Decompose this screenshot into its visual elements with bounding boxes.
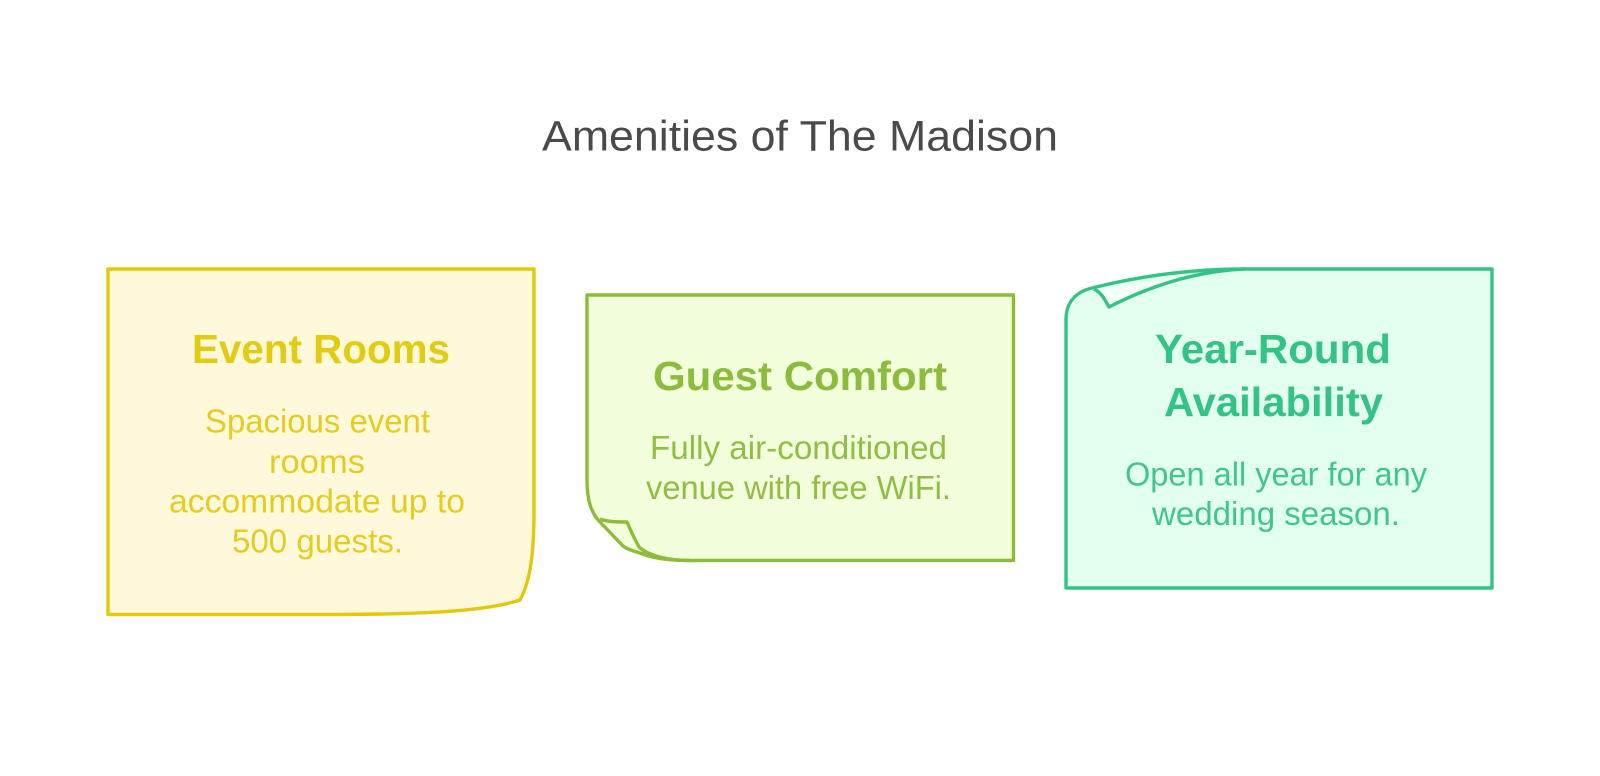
text: Year-Round description: Open all year for any [1125, 456, 1427, 492]
icon: folded corner [600, 519, 690, 560]
heading: Year-Round Availability [1155, 326, 1391, 425]
text: Guest Comfort description: venue with free WiFi. [646, 469, 951, 506]
heading: Event Rooms: Event Rooms [192, 326, 450, 372]
text: Event Rooms description: 500 guests. [232, 522, 403, 560]
heading: Guest Comfort: Guest Comfort [653, 353, 947, 399]
text: Year-Round description [1125, 456, 1427, 532]
text: Guest Comfort description [646, 429, 951, 506]
text: Event Rooms description: Spacious event [205, 402, 430, 440]
card shape: mint note with curled corner [1066, 269, 1492, 588]
heading: Year-Round Availability: Year-Round [1155, 326, 1391, 372]
panel: Year-Round Availability [1066, 269, 1492, 588]
text: Year-Round description: wedding season. [1151, 495, 1400, 532]
title: Amenities of The Madison [542, 113, 1058, 161]
card shape: lime note with folded corner [587, 295, 1014, 560]
text: Guest Comfort description: Fully air-conditioned [650, 429, 947, 466]
text: Event Rooms description: accommodate up to [169, 482, 465, 520]
text: Event Rooms description [169, 402, 465, 560]
text: Event Rooms description: rooms [269, 443, 365, 480]
card shape: yellow note [108, 269, 534, 614]
panel: Guest Comfort [587, 295, 1014, 560]
heading: Year-Round Availability: Availability [1164, 379, 1383, 425]
panel: Event Rooms [108, 269, 534, 614]
icon: curled corner [1094, 269, 1245, 307]
